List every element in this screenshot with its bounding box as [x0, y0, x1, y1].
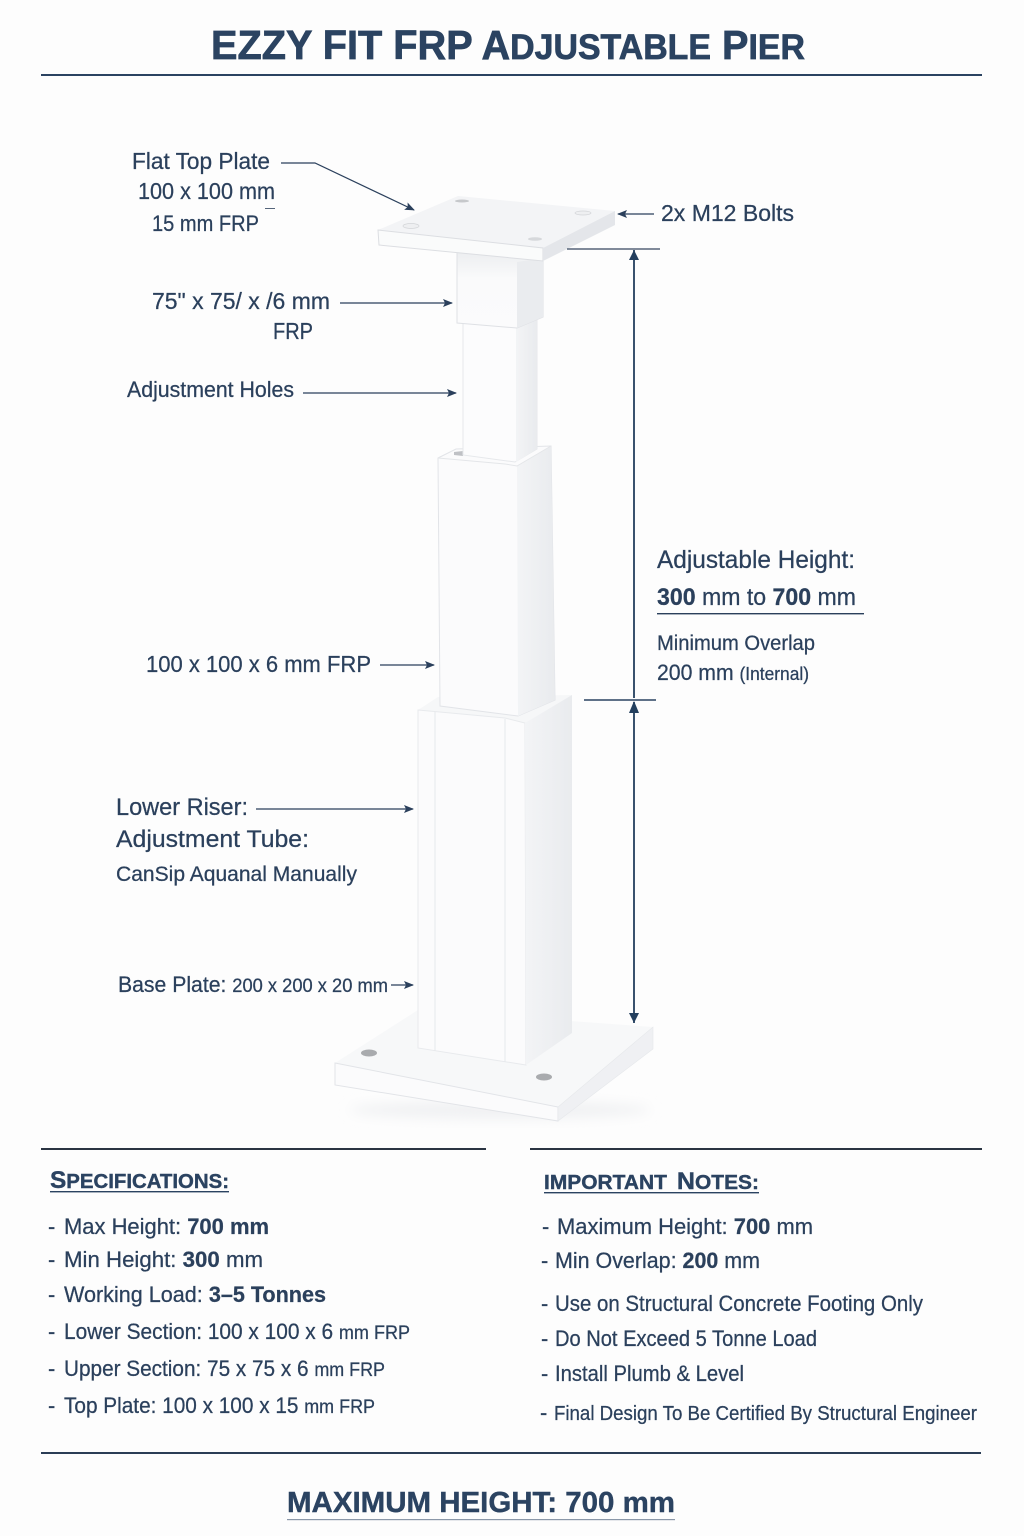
- notes list: -: [541, 1291, 548, 1316]
- notes list: Do Not Exceed 5 Tonne Load: [555, 1326, 817, 1351]
- callout: flat top plate: 15 mm FRP: [152, 211, 259, 236]
- panel: important notes: [530, 1148, 982, 1425]
- notes list: Min Overlap: 200 mm: [555, 1248, 760, 1273]
- adjustable height callout: [657, 546, 864, 685]
- callout: flat top plate: [132, 148, 414, 236]
- specification list: -: [48, 1247, 55, 1272]
- notes list: -: [541, 1361, 548, 1386]
- specification list: [48, 1214, 410, 1418]
- heading: important notes: IMPORTANT NOTES:: [544, 1168, 759, 1195]
- notes list: -: [541, 1326, 548, 1351]
- callout: lower riser: [116, 794, 413, 886]
- upper collar: [457, 252, 543, 328]
- notes list: Use on Structural Concrete Footing Only: [555, 1291, 923, 1316]
- specification list: Top Plate: 100 x 100 x 15 mm FRP: [64, 1393, 375, 1418]
- callout: adjustment holes: Adjustment Holes: [127, 377, 294, 402]
- specification list: -: [48, 1356, 55, 1381]
- adjustable height callout: 300 mm to 700 mm: [657, 584, 856, 611]
- specification list: -: [48, 1393, 55, 1418]
- specification list: Max Height: 700 mm: [64, 1214, 269, 1239]
- inner tube with adjustment holes: [454, 320, 537, 462]
- specification list: Min Height: 300 mm: [64, 1247, 263, 1272]
- callout: lower riser: CanSip Aquanal Manually: [116, 863, 357, 886]
- title: EZZY FIT FRP ADJUSTABLE PIER: [211, 22, 805, 68]
- ground shadow: [350, 1101, 650, 1119]
- adjustable height callout: 200 mm (Internal): [657, 660, 809, 685]
- lower riser tube: [418, 695, 572, 1065]
- dimension arrows: [567, 249, 660, 1023]
- panel: specifications: [41, 1148, 486, 1418]
- specification list: Working Load: 3–5 Tonnes: [64, 1282, 326, 1307]
- middle tube: [438, 446, 555, 716]
- top plate: [378, 196, 615, 261]
- notes list: -: [542, 1214, 549, 1239]
- specification list: -: [48, 1319, 55, 1344]
- pier illustration: [335, 196, 653, 1121]
- adjustable height callout: Minimum Overlap: [657, 632, 815, 655]
- notes list: Final Design To Be Certified By Structural Engineer: [554, 1403, 977, 1425]
- specification list: Lower Section: 100 x 100 x 6 mm FRP: [64, 1319, 410, 1344]
- specification list: Upper Section: 75 x 75 x 6 mm FRP: [64, 1356, 385, 1381]
- specification list: -: [48, 1214, 55, 1239]
- callout: flat top plate: 100 x 100 mm: [138, 178, 275, 204]
- base plate: [335, 1010, 653, 1121]
- callout: base plate: Base Plate: 200 x 200 x 20 mm: [118, 972, 388, 997]
- callout: upper tube size: FRP: [273, 318, 313, 344]
- callout: upper tube size: 75" x 75/ x /6 mm: [152, 288, 330, 314]
- notes list: -: [541, 1248, 548, 1273]
- callout: lower riser: Lower Riser:: [116, 794, 248, 821]
- specification list: -: [48, 1282, 55, 1307]
- adjustable height callout: Adjustable Height:: [657, 546, 855, 574]
- callout: lower riser: Adjustment Tube:: [116, 826, 309, 853]
- callout: middle tube size: 100 x 100 x 6 mm FRP: [146, 651, 371, 677]
- callout: upper tube size: [152, 288, 452, 344]
- callout: flat top plate: Flat Top Plate: [132, 148, 270, 174]
- notes list: Install Plumb & Level: [555, 1361, 744, 1386]
- notes list: [540, 1214, 977, 1425]
- footer banner: maximum height: MAXIMUM HEIGHT: 700 mm: [287, 1487, 675, 1519]
- callout: M12 bolts: 2x M12 Bolts: [661, 200, 794, 226]
- notes list: -: [540, 1400, 547, 1425]
- notes list: Maximum Height: 700 mm: [557, 1214, 813, 1239]
- heading: specifications: SPECIFICATIONS:: [50, 1167, 229, 1194]
